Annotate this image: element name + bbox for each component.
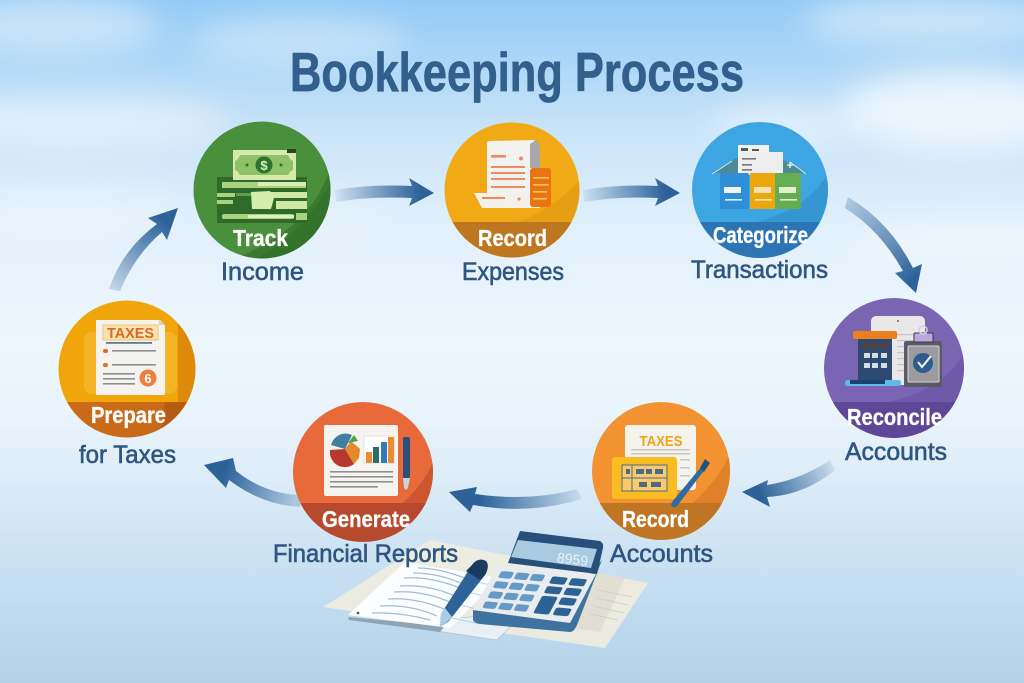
purple circle with band xyxy=(824,298,964,438)
label: Transactions: Transactions xyxy=(691,256,828,284)
arrow: record accounts to reports xyxy=(449,487,582,512)
calculator xyxy=(473,531,603,632)
label: Prepare: Prepare xyxy=(91,402,166,428)
icon: taxes document, ledger card and pen xyxy=(612,425,710,507)
icon: building document and clipboard xyxy=(845,316,942,387)
label: Track: Track xyxy=(233,225,288,251)
label: Accounts: Accounts xyxy=(845,438,947,466)
step: record accounts xyxy=(588,400,734,568)
arrow: taxes to income xyxy=(109,208,178,291)
blue circle with band xyxy=(690,120,830,262)
label: Record: Record xyxy=(478,225,547,251)
label: Expenses: Expenses xyxy=(462,258,564,286)
step: track income xyxy=(190,120,335,286)
pen xyxy=(440,560,488,627)
arrow: reports to taxes xyxy=(204,458,300,507)
icon: taxes form: 6 xyxy=(144,371,152,386)
label: Categorize: Categorize xyxy=(713,222,808,248)
icon: banknote and cash stack: $ xyxy=(260,158,268,173)
label: Income: Income xyxy=(221,258,304,286)
step: prepare for taxes xyxy=(55,298,199,469)
icon: taxes form: TAXES xyxy=(107,326,154,342)
label: Record: Record xyxy=(622,506,689,532)
calculator: 8959 xyxy=(556,549,589,569)
label: Reconcile: Reconcile xyxy=(847,404,942,430)
label: Financial Reports: Financial Reports xyxy=(273,540,458,568)
icon: banknote and cash stack xyxy=(217,149,307,223)
step: categorize transactions xyxy=(690,120,830,284)
icon: taxes form xyxy=(84,320,177,395)
arrow: income to expenses xyxy=(335,178,434,206)
label: Generate: Generate xyxy=(322,506,410,532)
title: Bookkeeping Process xyxy=(290,41,744,103)
white notepad xyxy=(348,562,520,640)
step: reconcile accounts xyxy=(824,298,964,460)
green circle xyxy=(190,120,335,262)
beige paper xyxy=(323,540,648,648)
amber circle with band xyxy=(55,298,199,442)
icon: taxes document, ledger card and pen: TAXES xyxy=(640,433,682,450)
label: for Taxes: for Taxes xyxy=(79,441,176,469)
illustration: calculator, paper and pen xyxy=(323,531,648,648)
label: Accounts: Accounts xyxy=(610,540,713,568)
orange circle with band xyxy=(588,400,734,543)
arrow: reconcile to record accounts xyxy=(742,460,835,507)
icon: receipt and orange note xyxy=(474,140,551,208)
icon: folders and papers xyxy=(712,145,806,209)
orange circle with band xyxy=(444,122,580,258)
step: record expenses xyxy=(440,120,585,286)
icon: folders and papers: + xyxy=(787,160,793,172)
arrow: expenses to transactions xyxy=(583,178,680,206)
red-orange circle with band xyxy=(290,400,436,545)
icon: report document with charts xyxy=(324,425,410,496)
step: generate financial reports xyxy=(273,400,458,568)
arrow: transactions to reconcile xyxy=(845,197,922,293)
